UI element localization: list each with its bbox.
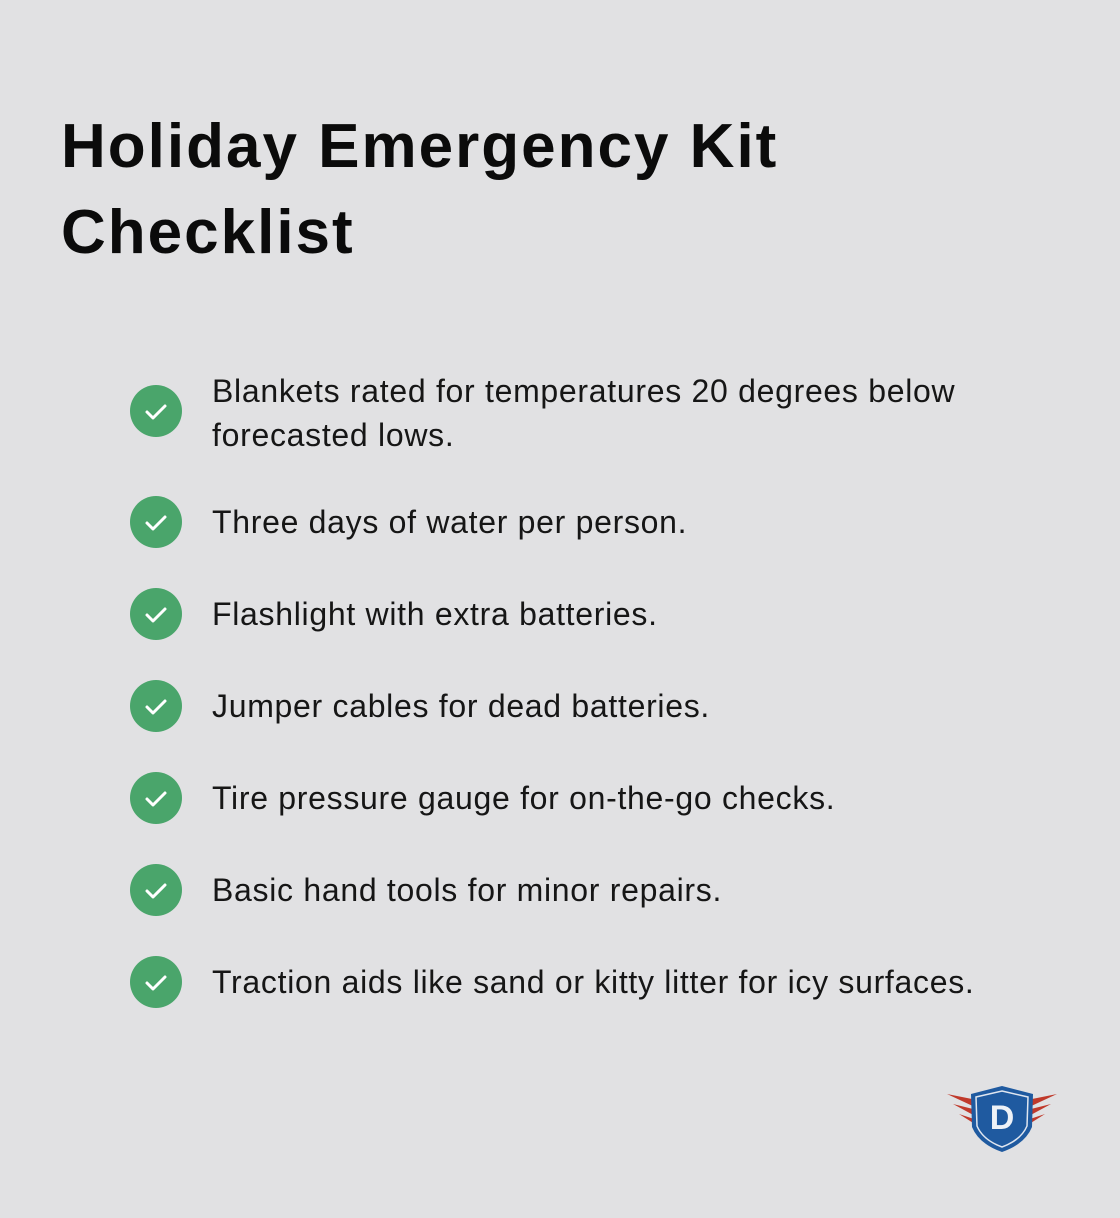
title	[61, 112, 778, 267]
item 5: Tire pressure gauge for on-the-go checks.	[212, 780, 835, 816]
title: Holiday Emergency Kit	[61, 112, 778, 181]
logo	[947, 1086, 1057, 1152]
item 1: forecasted lows.	[212, 417, 454, 453]
item 6	[130, 864, 722, 916]
item 2	[130, 496, 687, 548]
title: Checklist	[61, 198, 355, 267]
item 3: Flashlight with extra batteries.	[212, 596, 658, 632]
item 4	[130, 680, 710, 732]
item 3	[130, 588, 658, 640]
item 1: Blankets rated for temperatures 20 degrees below	[212, 373, 955, 409]
item 1	[130, 373, 955, 453]
item 5	[130, 772, 835, 824]
item 6: Basic hand tools for minor repairs.	[212, 872, 722, 908]
item 4: Jumper cables for dead batteries.	[212, 688, 710, 724]
item 2: Three days of water per person.	[212, 504, 687, 540]
item 7: Traction aids like sand or kitty litter for icy surfaces.	[212, 964, 975, 1000]
item 7	[130, 956, 975, 1008]
logo: D	[990, 1099, 1014, 1137]
